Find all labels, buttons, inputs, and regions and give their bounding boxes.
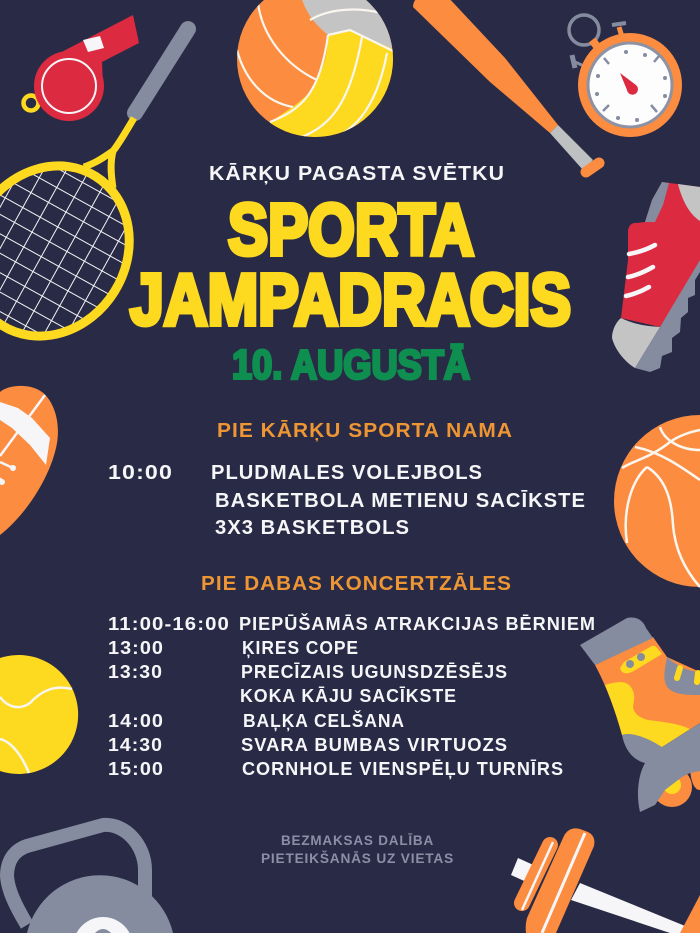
footer note [261,833,454,866]
icon: roller skate [580,617,700,812]
schedule: sports hall: PLUDMALES VOLEJBOLS [211,462,483,484]
icon: volleyball [237,0,393,137]
schedule: concert hall: 15:00 [108,758,164,779]
schedule: sports hall: 3X3 BASKETBOLS [215,517,410,539]
icon: tennis racket [0,29,188,366]
icon: dumbbell [511,828,700,933]
schedule: concert hall: KOKA KĀJU SACĪKSTE [240,685,457,706]
schedule: concert hall: 11:00-16:00 [108,613,230,634]
icon: basketball [614,415,700,587]
title [130,190,571,340]
schedule: concert hall: CORNHOLE VIENSPĒĻU TURNĪRS [242,758,564,779]
schedule: concert hall: BAĻĶA CELŠANA [243,710,405,731]
schedule: concert hall: 13:30 [108,661,163,682]
icon: baseball bat [413,0,599,172]
date: 10. AUGUSTĀ [232,342,470,388]
icon: tennis ball [0,655,78,774]
schedule: sports hall: 10:00 [108,462,173,484]
schedule: concert hall: 14:30 [108,734,163,755]
section heading: concert hall: PIE DABAS KONCERTZĀLES [201,573,512,595]
section heading: sports hall: PIE KĀRĶU SPORTA NAMA [217,420,513,442]
schedule: concert hall: PIEPŪŠAMĀS ATRAKCIJAS BĒRNIEM [239,613,596,634]
schedule: sports hall [108,462,586,539]
schedule: concert hall: 13:00 [108,637,164,658]
title: JAMPADRACIS [130,260,571,340]
schedule: concert hall: ĶIRES COPE [242,637,359,658]
icon: whistle [24,15,139,121]
schedule: concert hall: SVARA BUMBAS VIRTUOZS [241,734,508,755]
footer note: PIETEIKŠANĀS UZ VIETAS [261,851,454,866]
schedule: concert hall: 14:00 [108,710,164,731]
icon: sneaker [612,182,700,372]
icon: kettlebell [7,825,173,933]
subtitle: KĀRĶU PAGASTA SVĒTKU [209,163,505,185]
schedule: concert hall [108,613,596,779]
schedule: sports hall: BASKETBOLA METIENU SACĪKSTE [215,490,586,512]
schedule: concert hall: PRECĪZAIS UGUNSDZĒSĒJS [241,661,508,682]
icon: american football [0,386,58,535]
footer note: BEZMAKSAS DALĪBA [281,833,434,848]
icon: stopwatch [569,15,682,137]
title: SPORTA [228,190,474,270]
